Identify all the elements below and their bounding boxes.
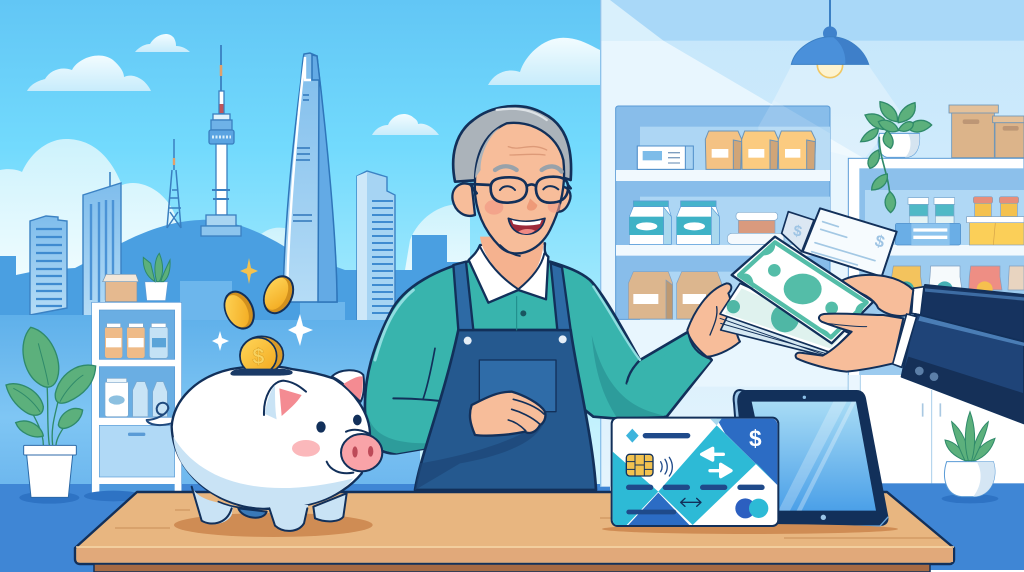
shelf unit: left side, by the plant — [92, 302, 182, 494]
near ear — [264, 381, 306, 420]
right shelf unit — [848, 158, 1024, 425]
eyes — [500, 186, 558, 190]
eyes — [316, 421, 326, 433]
coin in slot — [240, 336, 283, 374]
landmark: small radio tower — [167, 139, 181, 228]
hand on apron — [470, 392, 545, 436]
coin in slot: $ — [252, 344, 264, 369]
lamp — [791, 0, 869, 78]
left-hand fingers behind bills — [687, 283, 740, 357]
blue stacked box — [895, 223, 961, 245]
plant in white pot, left — [6, 327, 143, 504]
card logo diamond — [626, 429, 639, 443]
body — [172, 366, 370, 509]
sparkles — [212, 258, 313, 351]
landmark: Lotte skyscraper — [283, 53, 337, 302]
jars lower row — [890, 266, 1024, 297]
collar — [469, 243, 548, 303]
glasses — [470, 177, 571, 203]
chip — [626, 454, 653, 476]
cabinets lower right — [848, 375, 1024, 570]
neck — [480, 237, 544, 289]
top bill — [732, 237, 873, 343]
eyebrows — [495, 166, 562, 172]
receipt — [803, 208, 897, 277]
upper right hand — [839, 275, 913, 316]
mouth — [508, 218, 545, 234]
arrows — [702, 448, 723, 460]
ears — [452, 184, 475, 216]
green shirt torso and arms — [365, 260, 712, 453]
yellow containers — [967, 197, 1024, 245]
panel: store interior — [600, 0, 1024, 487]
wooden table — [75, 492, 954, 572]
building: right stepped tower — [357, 171, 395, 325]
building: left block — [30, 216, 67, 315]
building: slanted office tower — [83, 172, 121, 320]
tail — [147, 403, 172, 425]
lower right hand — [796, 314, 903, 372]
boxes on top of shelf — [949, 105, 1024, 158]
back shelf unit — [616, 100, 830, 320]
snout — [341, 434, 382, 471]
card network circles — [735, 498, 755, 518]
white product box — [637, 146, 693, 169]
payment card — [612, 418, 778, 526]
dollar sign: $ — [749, 426, 762, 452]
shadow under card — [602, 524, 898, 534]
milk cartons — [629, 201, 719, 244]
tablet — [734, 390, 888, 526]
background: sky — [0, 0, 600, 490]
slot — [230, 369, 293, 376]
box and small plant on left shelf — [103, 253, 170, 302]
plant on floor right — [942, 412, 998, 503]
tan sacks, bottom row — [628, 272, 722, 319]
piggy bank — [147, 336, 382, 537]
bottles — [908, 198, 955, 223]
face — [475, 123, 564, 253]
light cone — [757, 65, 902, 160]
lower city haze and floor — [0, 315, 610, 572]
number bars — [629, 479, 762, 495]
money handover — [687, 208, 1024, 423]
receipt: $ — [873, 231, 887, 252]
hair — [453, 106, 571, 182]
jars — [105, 323, 168, 417]
clouds — [27, 34, 600, 135]
far ear — [332, 370, 364, 402]
shopkeeper — [365, 106, 712, 490]
back bill — [782, 212, 814, 252]
falling coins — [219, 272, 299, 333]
cash stack — [720, 237, 873, 356]
cheek — [292, 440, 320, 457]
suit sleeve, upper — [912, 285, 1024, 347]
apron — [415, 262, 596, 490]
front legs — [192, 487, 308, 531]
back bill: $ — [792, 222, 804, 241]
hill and back skyline — [0, 220, 470, 341]
hanging plant — [861, 102, 932, 213]
jar on tray — [727, 212, 784, 244]
suit sleeve, lower — [893, 314, 1024, 423]
tan paper bags — [705, 131, 815, 169]
nose — [527, 198, 537, 211]
big background clouds — [0, 139, 470, 300]
head — [452, 106, 571, 256]
mouth — [327, 462, 353, 473]
landmark: Seoul tower — [201, 45, 241, 236]
back legs — [238, 493, 347, 521]
